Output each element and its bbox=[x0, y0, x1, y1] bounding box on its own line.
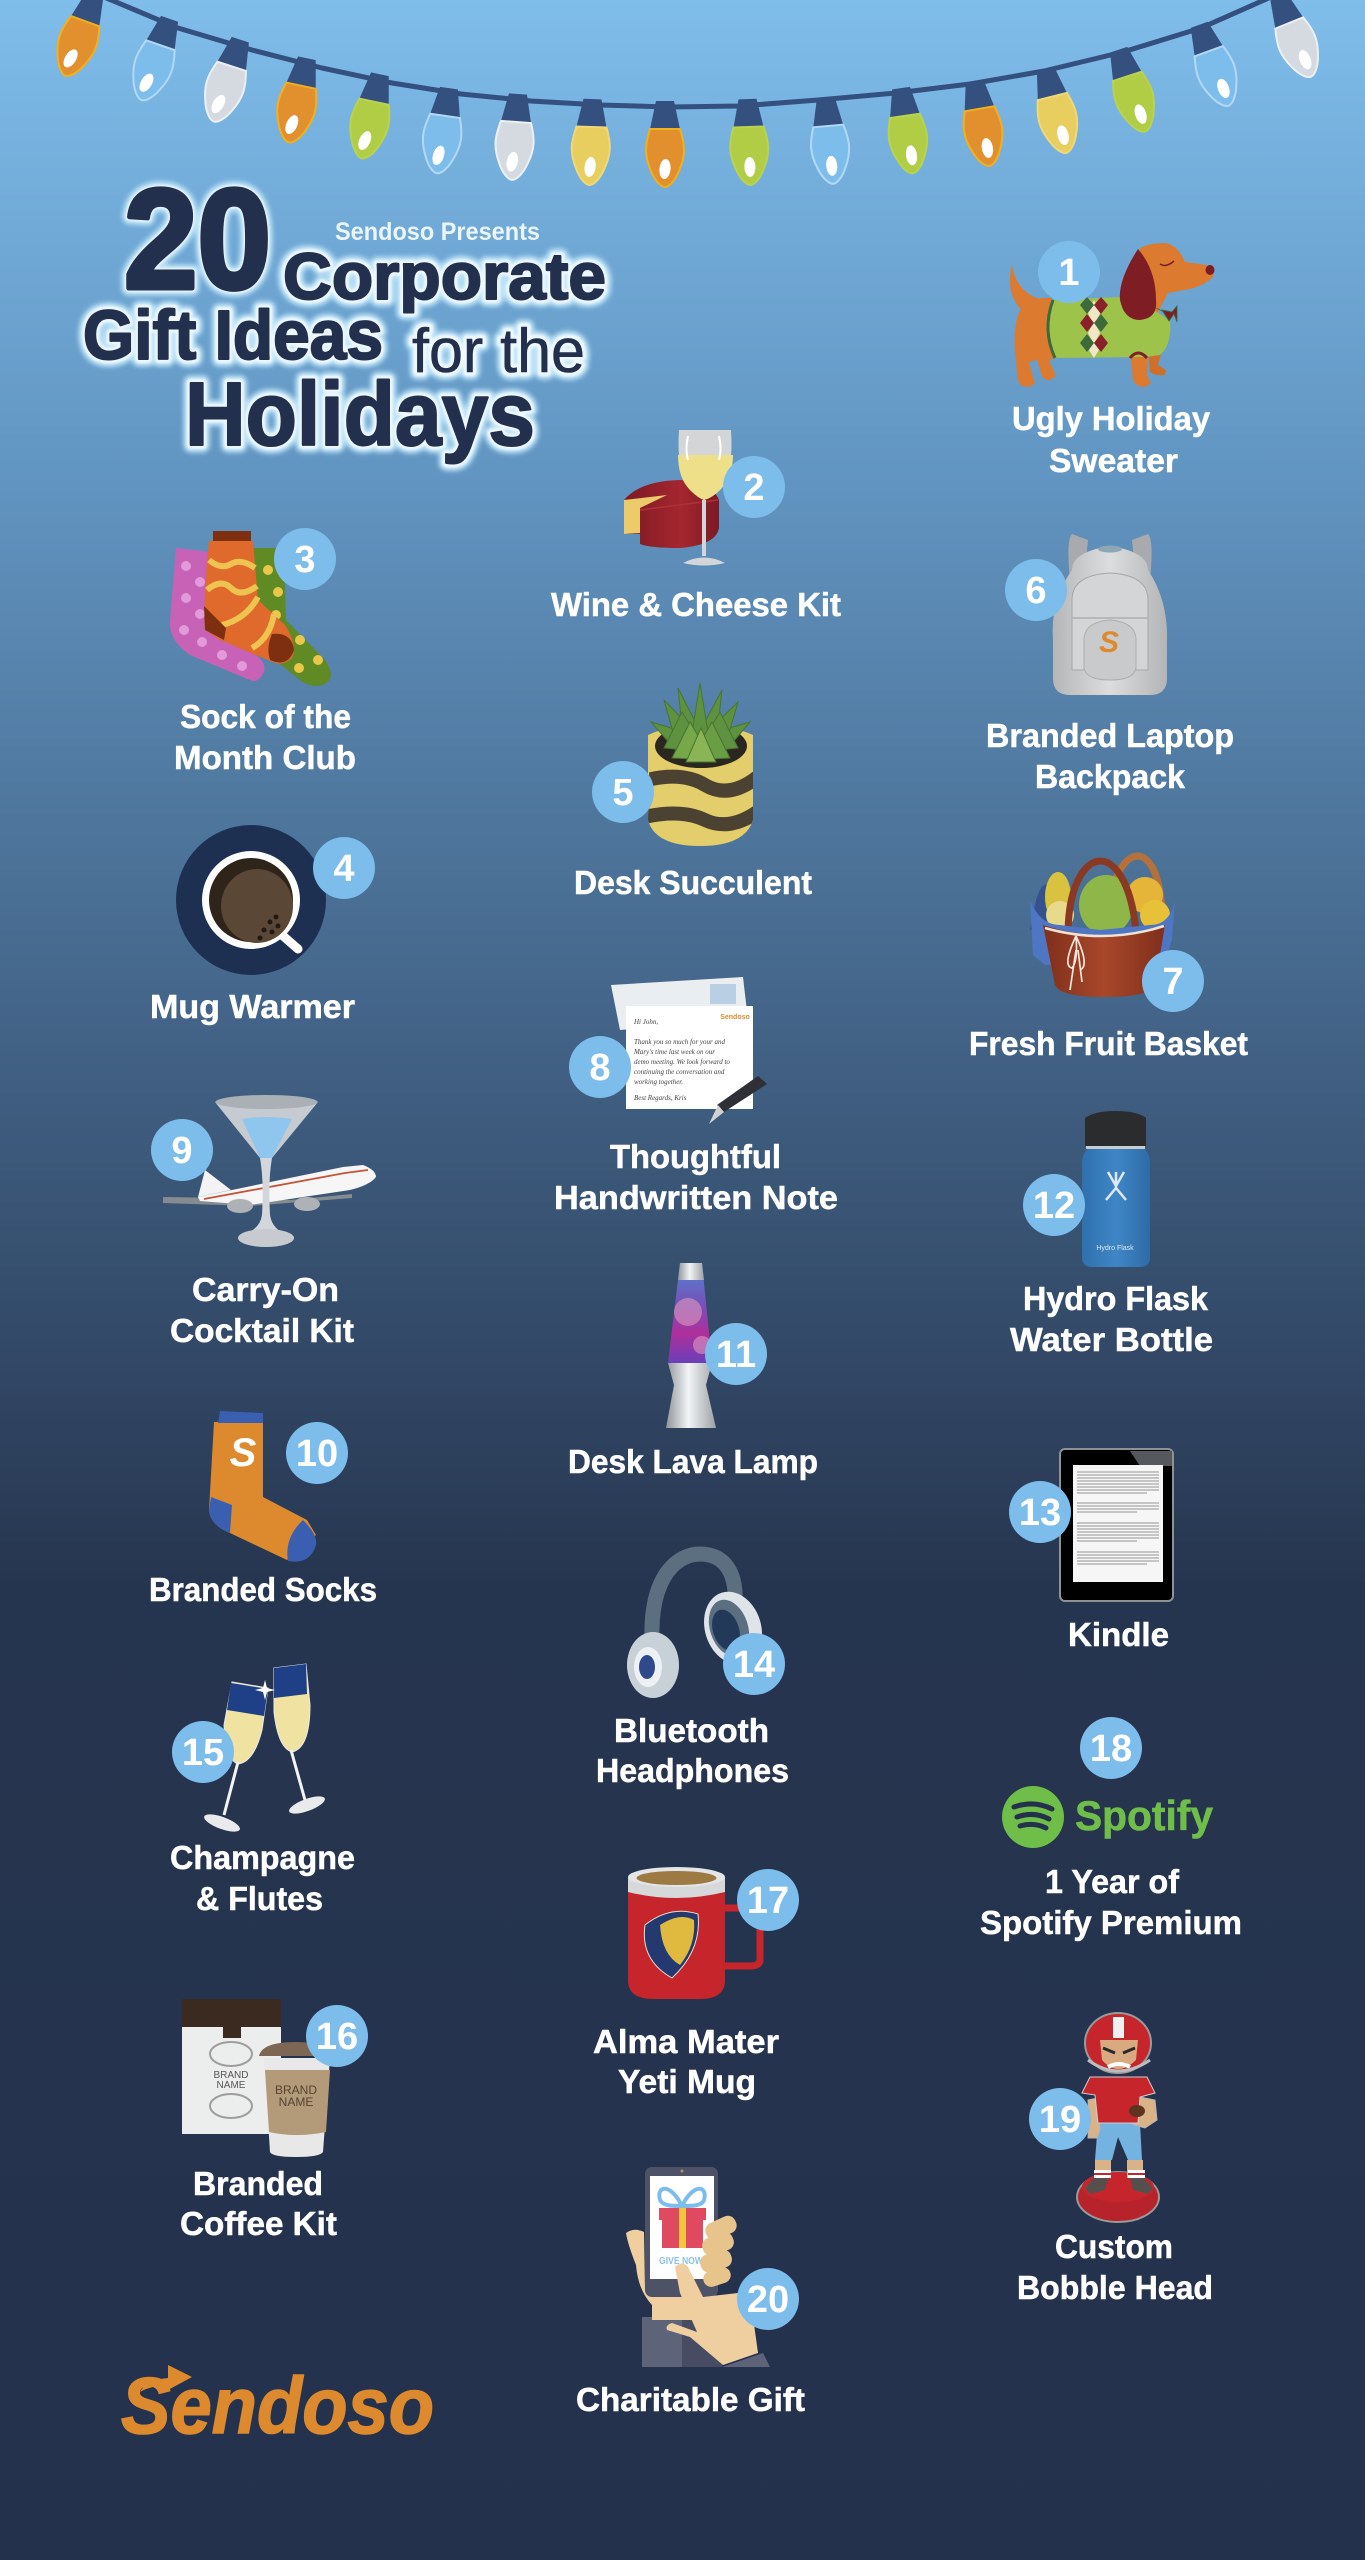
number badge 5: 5 bbox=[612, 772, 634, 814]
title block: for the bbox=[412, 317, 585, 386]
number badge 9: 9 bbox=[171, 1130, 193, 1172]
gift 15: champagne and flutes bbox=[170, 1664, 355, 1917]
label: Carry-On bbox=[192, 1271, 339, 1308]
label bbox=[1012, 400, 1211, 479]
gift 6: branded laptop backpack bbox=[986, 534, 1234, 795]
icon: coffee bag and cup: NAME bbox=[217, 2080, 246, 2091]
label: Champagne bbox=[170, 1839, 355, 1876]
icon: envelope, letter and pen: Best Regards, Kris bbox=[634, 1094, 687, 1102]
title block: Holidays bbox=[185, 365, 535, 465]
icon: coffee bag and cup: NAME bbox=[279, 2095, 313, 2109]
label bbox=[554, 1138, 838, 1216]
icon: envelope, letter and pen: working together. bbox=[634, 1078, 683, 1086]
number badge 12: 12 bbox=[1033, 1185, 1075, 1227]
title block: Corporate bbox=[283, 239, 606, 313]
icon: hand holding phone with gift: GIVE NOW bbox=[659, 2256, 703, 2267]
gift 11: desk lava lamp bbox=[568, 1263, 818, 1480]
title block: 20 bbox=[124, 160, 271, 319]
label: Thoughtful bbox=[610, 1138, 781, 1175]
number badge 8 bbox=[569, 1036, 631, 1098]
number badge 5 bbox=[592, 761, 654, 823]
number badge 8: 8 bbox=[589, 1047, 611, 1089]
label: & Flutes bbox=[196, 1880, 323, 1917]
number badge 2: 2 bbox=[743, 467, 765, 509]
number badge 19 bbox=[1029, 2088, 1091, 2150]
number badge 14 bbox=[723, 1633, 785, 1695]
string of holiday lights bbox=[48, 0, 1329, 187]
number badge 10 bbox=[286, 1422, 348, 1484]
icon: blue bottle: Hydro Flask bbox=[1096, 1245, 1134, 1252]
title block: for the bbox=[412, 317, 585, 386]
label: Desk Lava Lamp bbox=[568, 1443, 818, 1480]
label: Handwritten Note bbox=[554, 1179, 838, 1216]
number badge 11: 11 bbox=[716, 1334, 756, 1376]
icon: hand holding phone with gift bbox=[626, 2167, 770, 2367]
title block: for the bbox=[412, 317, 585, 386]
icon: lava lamp bbox=[666, 1263, 716, 1428]
gift 16: branded coffee kit bbox=[180, 1999, 368, 2242]
number badge 18: 18 bbox=[1090, 1728, 1132, 1770]
gift 5: desk succulent bbox=[574, 683, 812, 901]
icon: grey backpack with logo: S bbox=[1099, 626, 1119, 659]
number badge 15: 15 bbox=[182, 1732, 224, 1774]
label: Charitable Gift bbox=[576, 2381, 805, 2418]
title block: Sendoso Presents bbox=[335, 218, 540, 246]
label bbox=[1010, 1280, 1213, 1358]
number badge 12 bbox=[1023, 1174, 1085, 1236]
number badge 3: 3 bbox=[294, 539, 316, 581]
gift 10: branded socks bbox=[149, 1411, 377, 1608]
label: Month Club bbox=[174, 739, 356, 776]
number badge 6 bbox=[1005, 559, 1067, 621]
number badge 18 bbox=[1080, 1717, 1142, 1779]
label: Sock of the bbox=[180, 698, 351, 735]
label: Wine & Cheese Kit bbox=[551, 586, 841, 623]
label: Ugly Holiday bbox=[1012, 400, 1211, 437]
icon: envelope, letter and pen: Sendoso bbox=[720, 1014, 750, 1021]
number badge 7: 7 bbox=[1162, 961, 1184, 1003]
gift 7: fresh fruit basket bbox=[969, 856, 1248, 1062]
label: 1 Year of bbox=[1045, 1863, 1180, 1900]
label: Water Bottle bbox=[1010, 1321, 1213, 1358]
label bbox=[596, 1712, 789, 1789]
gift 14: bluetooth headphones bbox=[596, 1554, 789, 1789]
icon: envelope, letter and pen bbox=[611, 977, 767, 1124]
number badge 7 bbox=[1142, 950, 1204, 1012]
icon: e-reader bbox=[1060, 1449, 1173, 1601]
gift 17: alma mater yeti mug bbox=[593, 1867, 799, 2100]
number badge 13 bbox=[1009, 1481, 1071, 1543]
label bbox=[174, 698, 356, 776]
number badge 4: 4 bbox=[333, 848, 355, 890]
icon: blue bottle bbox=[1082, 1111, 1150, 1267]
icon: orange sock with logo: S bbox=[230, 1431, 257, 1475]
label: Yeti Mug bbox=[618, 2063, 756, 2100]
gift 2: wine and cheese kit bbox=[551, 430, 841, 623]
number badge 19: 19 bbox=[1039, 2099, 1081, 2141]
icon: spotify logo bbox=[1002, 1786, 1214, 1848]
label: Branded Laptop bbox=[986, 717, 1234, 754]
label: Desk Succulent bbox=[574, 864, 812, 901]
icon: coffee bag and cup bbox=[182, 1999, 330, 2157]
gift 4: mug warmer bbox=[150, 825, 375, 1025]
title block: Corporate bbox=[283, 239, 606, 313]
number badge 2 bbox=[723, 456, 785, 518]
icon: airplane and martini glass bbox=[163, 1095, 376, 1247]
number badge 6: 6 bbox=[1025, 570, 1047, 612]
gift 20: charitable gift bbox=[576, 2167, 805, 2418]
label: Spotify Premium bbox=[980, 1904, 1242, 1941]
gift 8: thoughtful handwritten note bbox=[554, 977, 838, 1216]
icon: envelope, letter and pen: continuing the conversation and bbox=[634, 1068, 725, 1076]
number badge 9 bbox=[151, 1119, 213, 1181]
gift 1: ugly holiday sweater bbox=[1010, 241, 1214, 479]
icon: fruit in wicker basket bbox=[1030, 856, 1175, 997]
title block: 20 bbox=[124, 160, 271, 319]
icon: grey backpack with logo bbox=[1053, 534, 1167, 695]
label: Branded bbox=[193, 2165, 323, 2202]
label: Sweater bbox=[1049, 442, 1178, 479]
label bbox=[986, 717, 1234, 795]
label bbox=[593, 2023, 779, 2100]
label: Backpack bbox=[1035, 758, 1186, 795]
gift 9: carry-on cocktail kit bbox=[151, 1095, 376, 1349]
icon: succulent in striped pot bbox=[648, 682, 753, 846]
label: Bluetooth bbox=[614, 1712, 769, 1749]
label bbox=[1017, 2228, 1213, 2306]
label: Fresh Fruit Basket bbox=[969, 1025, 1248, 1062]
label: Headphones bbox=[596, 1752, 789, 1789]
icon: coffee bag and cup: BRAND bbox=[213, 2070, 249, 2081]
label bbox=[980, 1863, 1242, 1941]
icon: envelope, letter and pen: demo meeting. We look forward to bbox=[634, 1058, 730, 1066]
icon: three patterned socks bbox=[170, 531, 331, 686]
title block: Holidays bbox=[185, 365, 535, 465]
label: Coffee Kit bbox=[180, 2205, 337, 2242]
label: Hydro Flask bbox=[1023, 1280, 1209, 1317]
title block: Gift Ideas bbox=[83, 296, 383, 374]
icon: clinking champagne flutes bbox=[202, 1664, 327, 1835]
label: Mug Warmer bbox=[150, 988, 355, 1025]
icon: red mug with bear logo bbox=[628, 1867, 760, 1999]
icon: orange sock with logo bbox=[209, 1411, 316, 1562]
gift 13: kindle bbox=[1009, 1449, 1173, 1653]
number badge 15 bbox=[172, 1721, 234, 1783]
icon: football player bobble head bbox=[1077, 2013, 1159, 2222]
title block: Gift Ideas bbox=[83, 296, 383, 374]
number badge 11 bbox=[705, 1323, 767, 1385]
number badge 16 bbox=[306, 2005, 368, 2067]
number badge 10: 10 bbox=[296, 1433, 338, 1475]
gift 3: sock of the month club bbox=[170, 528, 356, 776]
title block: 20 bbox=[124, 160, 271, 319]
icon: envelope, letter and pen: Thank you so much for your and bbox=[634, 1038, 725, 1046]
title block: Gift Ideas bbox=[83, 296, 383, 374]
label bbox=[180, 2165, 337, 2242]
icon: coffee bag and cup: BRAND bbox=[275, 2083, 317, 2097]
gift 12: hydro flask water bottle bbox=[1010, 1111, 1213, 1358]
label: Branded Socks bbox=[149, 1571, 377, 1608]
label: Kindle bbox=[1068, 1616, 1169, 1653]
number badge 17 bbox=[737, 1869, 799, 1931]
title block bbox=[83, 160, 606, 465]
label: Custom bbox=[1055, 2228, 1173, 2265]
sendoso logo: Sendoso bbox=[121, 2361, 434, 2450]
icon: spotify logo: Spotify bbox=[1075, 1792, 1214, 1839]
icon: coffee cup on warmer bbox=[176, 825, 326, 975]
label bbox=[170, 1839, 355, 1917]
number badge 1 bbox=[1038, 241, 1100, 303]
number badge 20 bbox=[737, 2268, 799, 2330]
title block: Holidays bbox=[185, 365, 535, 465]
icon: cheese wheel and wine glass bbox=[624, 430, 733, 566]
number badge 20: 20 bbox=[747, 2279, 789, 2321]
icon: envelope, letter and pen: Mary's time last week on our bbox=[633, 1048, 715, 1056]
number badge 17: 17 bbox=[747, 1880, 789, 1922]
number badge 4 bbox=[313, 837, 375, 899]
icon: dachshund in argyle sweater bbox=[1010, 243, 1214, 387]
icon: envelope, letter and pen: Hi John, bbox=[633, 1018, 658, 1026]
gift 19: custom bobble head bbox=[1017, 2013, 1213, 2306]
number badge 3 bbox=[274, 528, 336, 590]
number badge 13: 13 bbox=[1019, 1492, 1061, 1534]
number badge 14: 14 bbox=[733, 1644, 775, 1686]
number badge 1: 1 bbox=[1058, 252, 1080, 294]
icon: headphones bbox=[627, 1554, 771, 1698]
label: Bobble Head bbox=[1017, 2269, 1213, 2306]
label: Alma Mater bbox=[593, 2023, 779, 2060]
label: Cocktail Kit bbox=[170, 1312, 354, 1349]
number badge 16: 16 bbox=[316, 2016, 358, 2058]
gift 18: spotify premium bbox=[980, 1717, 1242, 1941]
label bbox=[170, 1271, 354, 1349]
title block: Corporate bbox=[283, 239, 606, 313]
